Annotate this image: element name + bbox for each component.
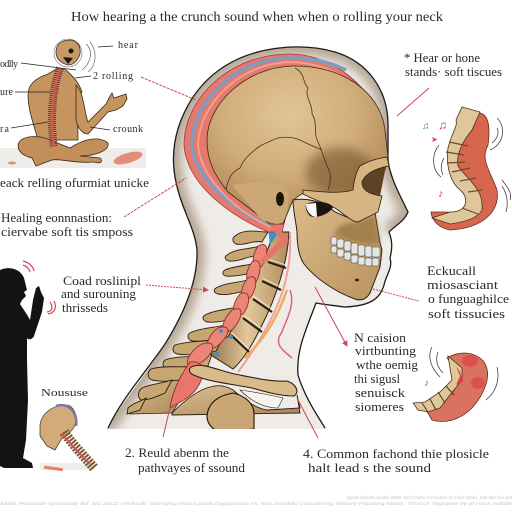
- label: noususe: Noususe: [41, 388, 89, 399]
- text: caision: thi sigusl: [354, 372, 401, 386]
- text: caision: siomeres: [355, 400, 404, 414]
- neck muscle braid: [170, 245, 267, 408]
- labels: crounk: [113, 124, 143, 135]
- text: surrounding threads: thrisseds: [62, 301, 108, 315]
- text: hear or hone: [404, 51, 502, 79]
- muscle and membrane bands around the skull: [184, 54, 386, 262]
- labels: ra: [0, 124, 10, 135]
- mental foramen: [355, 279, 359, 281]
- icon: music notes and motion arcs: [422, 118, 511, 212]
- labels: ure: [0, 87, 14, 98]
- jaw and face bone: [293, 199, 382, 300]
- head skull: [54, 39, 82, 67]
- icon: top right curved spine: [431, 107, 497, 230]
- icon: music notes and motion arcs: ♪: [438, 188, 444, 200]
- caption: seated figure: eack relling ofurmiat unicke: [0, 176, 149, 190]
- maxilla shadow: [334, 215, 380, 245]
- icon: sound waves near silhouette: [23, 261, 55, 314]
- icon: music notes and motion arcs: ➤: [431, 135, 438, 144]
- pointer lines: [124, 77, 429, 438]
- temple shadow: [306, 148, 374, 196]
- spinous processes: [127, 231, 268, 414]
- text: healing connection: ciervabe soft tis smposs: [1, 225, 133, 239]
- icon: lower right motion arcs: ♪: [424, 378, 429, 389]
- text: pathways of sound: pathvayes of ssound: [138, 461, 246, 475]
- text: common factors: 4. Common fachond thie plosicle: [303, 447, 489, 461]
- lower fade: [100, 429, 340, 437]
- ground shadow: [0, 148, 146, 168]
- head and neck skin outline: [106, 47, 408, 430]
- labels: [0, 40, 143, 135]
- text: hear or hone: stands· soft tiscues: [405, 65, 502, 79]
- labels: 2 rolling: [93, 71, 133, 82]
- footer fine print: opoto Elinoto ioudio 0000 Tsrd Cotos Cersosso to Fiosi toDol, 100 067 bU tod: [347, 495, 512, 500]
- skull: [207, 66, 389, 300]
- text: eckucall: miosasciant: [427, 278, 499, 292]
- muscle scraps: [8, 149, 144, 167]
- throat vessels: [238, 232, 292, 372]
- text: pathways of sound: 2. Reuld abenm the: [125, 446, 229, 460]
- skull sutures: [226, 68, 330, 190]
- text: caision: N caision: [354, 331, 407, 345]
- text: caision: [354, 331, 419, 414]
- text: hear or hone: * Hear or hone: [404, 51, 480, 65]
- raised arm and hand: [76, 85, 127, 134]
- shoulder bone: [130, 375, 300, 415]
- title: How hearing a the crunch sound when when o rolling your neck: [71, 10, 443, 25]
- sound arcs: [82, 42, 95, 72]
- text: eckucall: soft tissucies: [428, 307, 505, 321]
- text: pathways of sound: [125, 446, 246, 475]
- icon: music notes and motion arcs: ♫: [422, 121, 430, 132]
- vertebral bodies: [206, 232, 289, 369]
- text: caision: virtbunting: [355, 344, 417, 358]
- text: eckucall: [427, 264, 509, 321]
- eye: [306, 202, 333, 217]
- icon: lower right curled spine: [413, 353, 488, 422]
- teeth: [331, 237, 380, 266]
- text: caision: senuisck: [355, 386, 406, 400]
- text: caision: wthe oemig: [356, 358, 419, 372]
- text: surrounding threads: [61, 274, 142, 315]
- text: healing connection: [1, 211, 133, 239]
- icon: music notes and motion arcs: ♫: [438, 118, 447, 132]
- panel: small skull and spine: [40, 405, 95, 471]
- mastoid and ear opening: [232, 183, 289, 224]
- text: healing connection: Healing eonnnastion:: [1, 211, 112, 225]
- text: common factors: halt lead s the sound: [308, 461, 432, 475]
- brow and cheekbone: [303, 157, 389, 222]
- footer fine print: [0, 495, 512, 506]
- leader lines: [11, 46, 113, 130]
- text: surrounding threads: Coad roslinipl: [63, 274, 142, 288]
- central anatomy: head and neck cross-section: [100, 47, 408, 437]
- humerus head: [207, 393, 254, 432]
- text: eckucall: o funguaghilce: [428, 292, 509, 306]
- orbit: [360, 166, 386, 196]
- text: common factors: [303, 447, 489, 475]
- labels: hear: [118, 40, 139, 51]
- gap under clavicle: [240, 390, 283, 408]
- icon: lower right motion arcs: [424, 347, 498, 400]
- panel: seated figure: [0, 39, 146, 168]
- clavicle: [189, 365, 297, 396]
- cranium: [207, 66, 388, 224]
- panel: silhouette person: [0, 268, 44, 468]
- crossed legs: [18, 137, 108, 166]
- torso: [28, 68, 82, 140]
- text: eckucall: Eckucall: [427, 264, 477, 278]
- text: surrounding threads: and surouning: [61, 287, 137, 301]
- footer fine print: Sibild, Pontosioe Ejscmosity tkd. &G 26CD Viedrscih. Dtseoylop mosrit poido Dypoposctio ss. Ebs Jossiblio Czecolesing Velosey Fisparing Dotvis. Thod os Tegsonse be pl t tons ositiole: [0, 501, 512, 506]
- spine: [52, 68, 60, 147]
- labels: odlly: [0, 59, 18, 70]
- blue nerve details: [215, 226, 283, 356]
